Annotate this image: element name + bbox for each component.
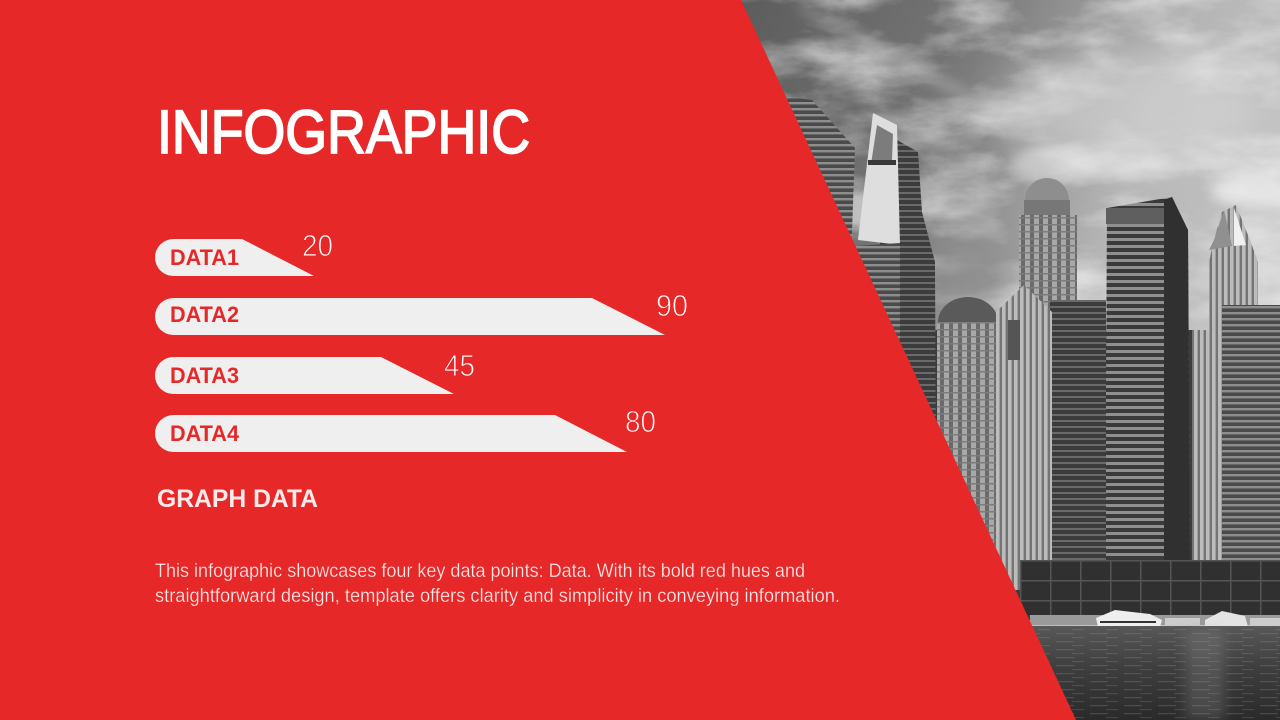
description text: This infographic showcases four key data points: Data. With its bold red hues and [155, 560, 805, 582]
bar chart [155, 228, 688, 452]
bar: DATA1: DATA1 [170, 245, 239, 270]
tower: sail-shaped white crown [856, 113, 936, 480]
value: 90: 90 [656, 288, 688, 323]
subheading: GRAPH DATA [157, 485, 318, 513]
boats at the quay [1030, 610, 1280, 627]
bar: DATA2: DATA2 [170, 302, 239, 327]
tower: lower right block [1222, 305, 1280, 567]
tower: slim pale block [1192, 330, 1222, 565]
description text [155, 560, 840, 607]
water [1030, 626, 1280, 720]
building base behind towers [900, 330, 1280, 620]
tower: spire right [1209, 205, 1258, 335]
bar: DATA4 [155, 415, 627, 452]
bar: DATA2 [155, 298, 665, 335]
tower: far left under construction [787, 97, 855, 260]
tower: pale tower front [996, 285, 1052, 590]
bar: DATA4: DATA4 [170, 421, 240, 446]
tower: small dome [937, 297, 1000, 562]
tower: domed tower [1019, 178, 1077, 310]
bar: DATA3 [155, 357, 454, 394]
photo: city skyline in greyscale [740, 0, 1280, 720]
value: 20: 20 [302, 228, 333, 263]
title: INFOGRAPHIC [157, 98, 530, 166]
value: 80: 80 [625, 404, 656, 439]
podium buildings [1020, 560, 1280, 615]
description text: straightforward design, template offers clarity and simplicity in conveying information. [155, 585, 840, 607]
tower: mid block [1050, 300, 1106, 568]
tower: tall dark block [1105, 197, 1190, 565]
bar: DATA1 [155, 239, 314, 276]
sky with clouds [740, 0, 1280, 626]
value: 45: 45 [444, 348, 475, 383]
bar: DATA3: DATA3 [170, 363, 239, 388]
